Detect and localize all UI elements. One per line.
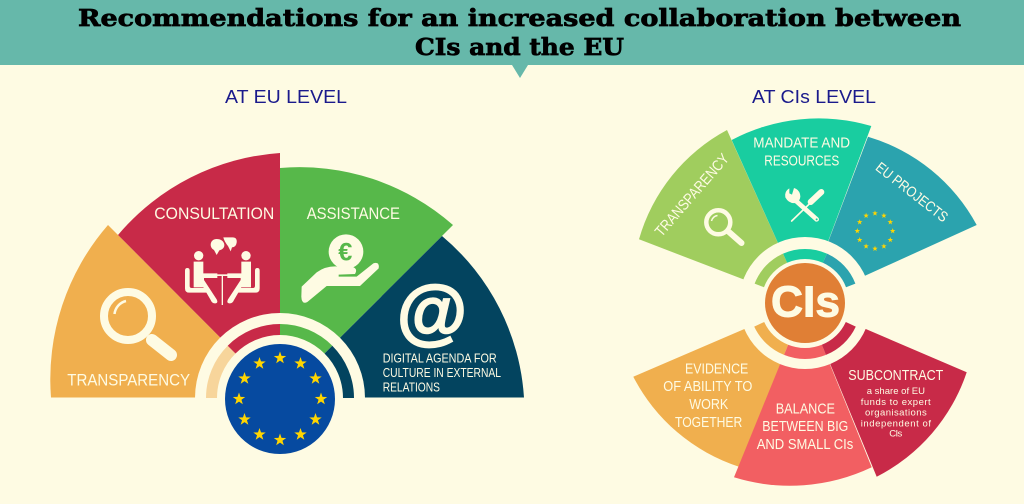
label: balance: BALANCE bbox=[776, 401, 835, 417]
segment: evidence bbox=[633, 303, 805, 467]
label: assistance: ASSISTANCE bbox=[307, 204, 400, 223]
inner ring bbox=[739, 237, 871, 369]
label: digital agenda: RELATIONS bbox=[383, 381, 440, 395]
label: balance: BETWEEN BIG bbox=[762, 419, 848, 435]
segment: consultation bbox=[118, 153, 280, 398]
label: evidence of ability bbox=[663, 361, 752, 431]
heading: at EU level: AT EU LEVEL bbox=[225, 87, 347, 107]
label: digital agenda: CULTURE IN EXTERNAL bbox=[383, 366, 501, 380]
label: mandate and resources bbox=[753, 136, 850, 169]
label: subcontract: CIs bbox=[889, 429, 903, 440]
icon: EU stars bbox=[855, 210, 895, 251]
icon: two people talking at a table bbox=[185, 237, 260, 305]
label: evidence of ability: WORK bbox=[689, 397, 729, 413]
icon: magnifier bbox=[104, 292, 171, 355]
EU flag circle bbox=[225, 344, 335, 454]
label: EU projects: EU PROJECTS bbox=[872, 160, 951, 226]
label: subcontract: a share of EU bbox=[867, 386, 925, 397]
inner ring bbox=[195, 313, 365, 483]
segment: balance bbox=[734, 303, 872, 486]
label: subcontract: funds to expert bbox=[861, 397, 931, 408]
segment: EU projects bbox=[805, 137, 977, 303]
label: transparency: TRANSPARENCY bbox=[652, 151, 733, 240]
label: subcontract bbox=[848, 367, 943, 440]
label: evidence of ability: OF ABILITY TO bbox=[663, 379, 752, 395]
header banner bbox=[0, 0, 1024, 78]
segment: digital agenda bbox=[280, 236, 524, 398]
label: evidence of ability: EVIDENCE bbox=[685, 361, 749, 377]
label: digital agenda bbox=[383, 351, 501, 395]
title: CIs and the EU bbox=[415, 34, 624, 61]
segment: mandate and resources bbox=[732, 118, 871, 303]
segment: assistance bbox=[280, 167, 453, 398]
segment: transparency bbox=[50, 225, 280, 398]
segment: transparency bbox=[639, 130, 805, 303]
icon: at sign: @ bbox=[397, 272, 467, 352]
panel: CIs level wheel bbox=[633, 118, 977, 486]
icon: hand holding euro coin: € bbox=[338, 239, 352, 267]
label: subcontract: independent of bbox=[861, 418, 931, 429]
title bbox=[78, 5, 961, 61]
icon: wrench and screwdriver bbox=[785, 188, 821, 221]
label: subcontract: organisations bbox=[865, 408, 927, 419]
label: mandate and resources: MANDATE AND bbox=[753, 136, 850, 152]
label: transparency: TRANSPARENCY bbox=[67, 371, 190, 390]
CIs hub: CIs bbox=[771, 278, 840, 327]
title: Recommendations for an increased collaboration between bbox=[78, 5, 961, 32]
icon: magnifier bbox=[706, 210, 742, 243]
panel: EU level semicircle bbox=[50, 153, 524, 483]
label: digital agenda: DIGITAL AGENDA FOR bbox=[383, 351, 497, 365]
label: balance bbox=[757, 401, 853, 453]
label: balance: AND SMALL CIs bbox=[757, 437, 853, 453]
label: evidence of ability: TOGETHER bbox=[675, 415, 742, 431]
CIs hub bbox=[765, 263, 845, 343]
label: subcontract: SUBCONTRACT bbox=[848, 367, 943, 384]
label: mandate and resources: RESOURCES bbox=[764, 153, 839, 169]
heading: at CIs level: AT CIs LEVEL bbox=[752, 87, 876, 107]
segment: subcontract bbox=[805, 303, 967, 477]
icon: hand holding euro coin bbox=[301, 234, 379, 303]
label: consultation: CONSULTATION bbox=[154, 204, 274, 223]
